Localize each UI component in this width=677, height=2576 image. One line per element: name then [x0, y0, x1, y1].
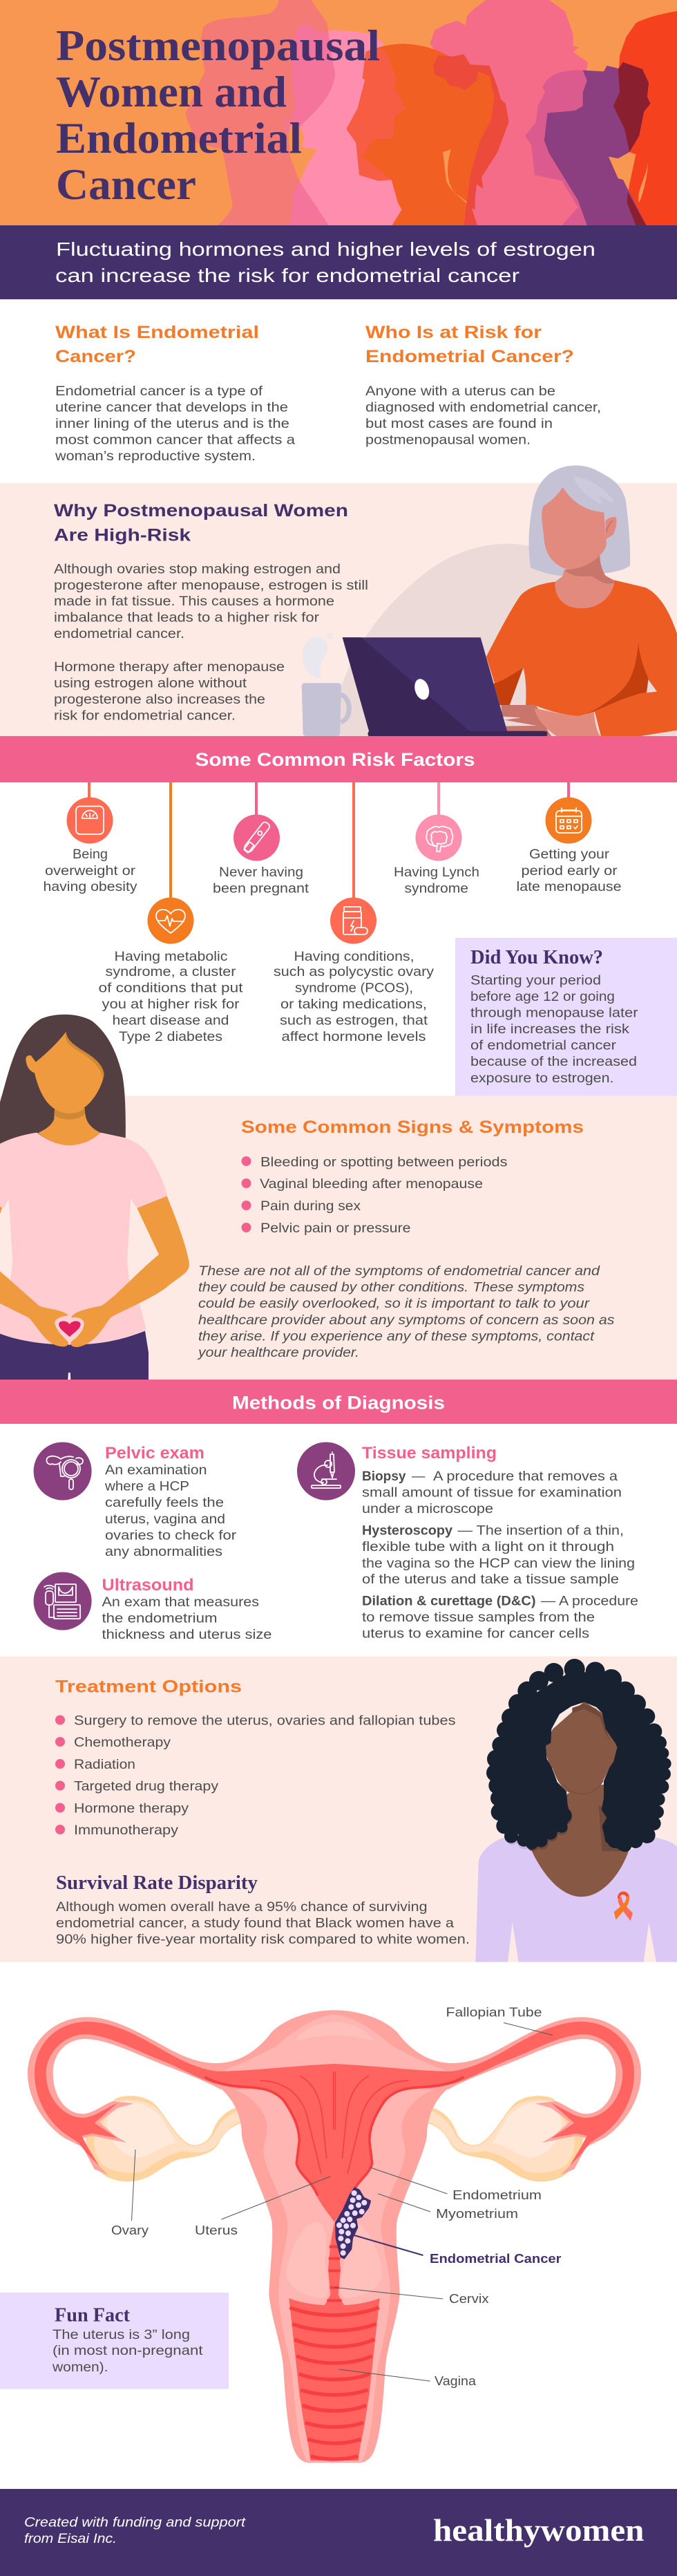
risk factor: overweight: Being — [73, 847, 108, 862]
risk factor: overweight: having obesity — [43, 879, 137, 894]
symptom list: Vaginal bleeding after menopause — [260, 1176, 483, 1192]
band: methods of diagnosis: Methods of Diagnosis — [232, 1392, 445, 1413]
diagnosis: ultrasound: An exam that measures — [102, 1595, 259, 1610]
heading: Are High-Risk — [54, 525, 191, 545]
body text — [54, 561, 368, 723]
text block: who is at risk: Who Is at Risk for — [365, 323, 542, 342]
diagnosis: tissue sampling: — — [412, 1469, 426, 1484]
footer — [0, 2489, 677, 2576]
treatment list: Chemotherapy — [74, 1735, 171, 1750]
risk factor: metabolic syndrome: heart disease and — [112, 1013, 229, 1028]
diagnosis: pelvic exam: Pelvic exam — [105, 1444, 204, 1463]
risk factor: early period or late menopause: late menopause — [517, 879, 622, 894]
risk factor: early period or late menopause — [517, 782, 622, 894]
risk factor: early period or late menopause: period early or — [521, 863, 618, 878]
diagnosis: tissue sampling: Biopsy — [362, 1469, 406, 1484]
text block: what is endometrial cancer: What Is Endometrial — [55, 323, 259, 342]
italic note: could be easily overlooked, so it is important to talk to your — [198, 1296, 591, 1311]
treatment list: Immunotherapy — [74, 1823, 178, 1838]
icon: intestines — [426, 827, 453, 852]
title — [56, 21, 380, 209]
anatomy labels: Vagina — [435, 2374, 477, 2388]
icon: uterus with magnifier — [46, 1456, 83, 1489]
callout: did you know: before age 12 or going — [470, 989, 615, 1004]
risk factor: conditions and medications: or taking medications, — [280, 997, 427, 1012]
body text: risk for endometrial cancer. — [54, 708, 236, 723]
italic note: they could be caused by other conditions. These symptoms — [198, 1280, 584, 1295]
diagnosis: tissue sampling: A procedure that removes a — [433, 1469, 618, 1484]
risk factor: metabolic syndrome: syndrome, a cluster — [105, 964, 236, 979]
header silhouettes of women — [186, 0, 677, 225]
callout: did you know: through menopause later — [470, 1005, 638, 1020]
survival rate disparity: Survival Rate Disparity — [56, 1872, 258, 1894]
icon: scale — [76, 806, 104, 834]
diagnosis: tissue sampling: Dilation & curettage (D&C) — [362, 1594, 536, 1609]
title: Women and — [56, 67, 287, 116]
diagnosis: ultrasound: the endometrium — [102, 1610, 217, 1626]
diagnosis: tissue sampling: under a microscope — [362, 1501, 493, 1516]
treatment list — [55, 1713, 456, 1838]
anatomy labels: Fallopian Tube — [446, 2006, 542, 2020]
risk factor: overweight — [43, 782, 137, 894]
callout: fun fact: (in most non-pregnant — [53, 2343, 203, 2358]
diagnosis: tissue sampling: — The insertion of a thin, — [457, 1523, 624, 1539]
survival rate disparity — [56, 1872, 470, 1947]
panel: treatment options — [0, 1656, 677, 1962]
icon: microscope — [312, 1452, 341, 1488]
anatomy labels: Myometrium — [436, 2207, 518, 2221]
text block: what is endometrial cancer: uterine cancer that develops in the — [55, 399, 288, 415]
callout: did you know: exposure to estrogen. — [470, 1071, 613, 1086]
body text: Hormone therapy after menopause — [54, 659, 285, 675]
icon: heart with pulse — [156, 910, 185, 933]
callout: did you know: because of the increased — [470, 1054, 637, 1069]
risk factor: metabolic syndrome: of conditions that put — [98, 980, 243, 995]
risk factor: conditions and medications — [274, 782, 434, 1044]
body text: endometrial cancer. — [54, 626, 184, 641]
diagnosis: tissue sampling: small amount of tissue for examination — [362, 1485, 622, 1500]
diagnosis: tissue sampling — [297, 1442, 638, 1641]
diagnosis: tissue sampling: the vagina so the HCP can view the lining — [362, 1556, 635, 1571]
risk factor: conditions and medications: syndrome (PCOS), — [295, 980, 413, 995]
diagnosis: pelvic exam: An examination — [105, 1463, 207, 1478]
diagnosis: tissue sampling: Tissue sampling — [362, 1444, 497, 1463]
callout: fun fact: women). — [52, 2360, 108, 2375]
body text: progesterone also increases the — [54, 692, 265, 707]
callout: fun fact: Fun Fact — [55, 2304, 131, 2326]
callout: did you know — [455, 938, 677, 1096]
icon: calendar — [556, 808, 582, 833]
diagnosis: tissue sampling: flexible tube with a light on it through — [362, 1539, 614, 1554]
icon: pregnancy test — [242, 821, 271, 854]
footer: from Eisai Inc. — [24, 2531, 117, 2546]
treatment list: Radiation — [74, 1757, 135, 1772]
treatment list: Targeted drug therapy — [74, 1779, 218, 1794]
callout: fun fact — [0, 2293, 229, 2389]
subtitle band: Fluctuating hormones and higher levels of estrogen — [56, 238, 595, 260]
callout: fun fact: The uterus is 3” long — [53, 2327, 190, 2342]
hair — [486, 1659, 671, 1852]
risk factor: never pregnant — [213, 782, 309, 896]
anatomy labels: Ovary — [111, 2224, 149, 2237]
italic note: healthcare provider about any symptoms of concern as soon as — [198, 1313, 615, 1328]
text block: what is endometrial cancer: woman’s reproductive system. — [55, 449, 256, 464]
diagnosis: pelvic exam: ovaries to check for — [105, 1527, 237, 1543]
anatomy labels — [111, 2006, 561, 2388]
panel: why postmenopausal women are high-risk — [0, 465, 677, 737]
illustration: Black woman with ribbon — [475, 1659, 677, 1962]
panel: signs and symptoms — [0, 1015, 677, 1380]
diagnosis: tissue sampling: — A procedure — [541, 1594, 638, 1609]
anatomy labels: Cervix — [449, 2292, 489, 2306]
risk factor: lynch syndrome — [394, 782, 479, 896]
diagnosis: tissue sampling: Hysteroscopy — [362, 1523, 452, 1539]
body text: imbalance that leads to a higher risk for — [54, 610, 320, 625]
diagnosis: ultrasound — [34, 1572, 271, 1642]
italic note: These are not all of the symptoms of endometrial cancer and — [198, 1263, 600, 1279]
diagnosis: ultrasound: Ultrasound — [102, 1576, 193, 1595]
symptom list — [242, 1154, 508, 1236]
diagnosis: tissue sampling: to remove tissue samples from the — [362, 1610, 595, 1625]
text block: who is at risk: but most cases are found in — [365, 416, 553, 431]
symptom list: Pelvic pain or pressure — [260, 1221, 410, 1236]
text block: who is at risk — [365, 323, 601, 448]
text block: what is endometrial cancer: Cancer? — [55, 347, 136, 366]
heading — [54, 501, 348, 545]
body text: using estrogen alone without — [54, 676, 247, 691]
diagnosis: tissue sampling: uterus to examine for cancer cells — [362, 1626, 589, 1641]
survival rate disparity: 90% higher five-year mortality risk compared to white women. — [56, 1932, 470, 1947]
icon: pill bottle — [343, 907, 368, 934]
risk factor: never pregnant: Never having — [219, 865, 303, 880]
symptom list: Pain during sex — [260, 1198, 361, 1214]
diagnosis: pelvic exam: where a HCP — [104, 1479, 189, 1494]
body text: Although ovaries stop making estrogen and — [54, 561, 341, 576]
anatomy diagram: uterus — [28, 2006, 641, 2463]
anatomy labels: Uterus — [195, 2224, 238, 2237]
diagnosis: pelvic exam: uterus, vagina and — [105, 1512, 225, 1527]
risk factor: lynch syndrome: syndrome — [405, 881, 468, 896]
text block: who is at risk: Endometrial Cancer? — [365, 347, 574, 366]
risk factor: early period or late menopause: Getting your — [529, 847, 610, 862]
uterus right half — [334, 2010, 641, 2463]
uterus left half — [28, 2010, 334, 2463]
text block: what is endometrial cancer: most common cancer that affects a — [55, 433, 295, 448]
text block: what is endometrial cancer — [55, 323, 295, 464]
ribbon — [614, 1892, 633, 1921]
callout: did you know: Did You Know? — [470, 947, 603, 968]
callout: did you know: in life increases the risk — [470, 1022, 629, 1037]
illustration: woman with hands forming heart — [0, 1015, 189, 1380]
text block: who is at risk: postmenopausal women. — [365, 433, 531, 448]
band: some common risk factors: Some Common Risk Factors — [195, 749, 475, 770]
risk factor: overweight: overweight or — [45, 863, 136, 878]
risk factor: metabolic syndrome: Having metabolic — [115, 949, 228, 964]
body text: progesterone after menopause, estrogen is still — [54, 578, 368, 593]
title: Postmenopausal — [56, 21, 380, 70]
title: Endometrial — [56, 113, 302, 162]
cancer cluster — [336, 2188, 370, 2258]
risk factor: metabolic syndrome: you at higher risk for — [102, 997, 240, 1012]
text block: who is at risk: diagnosed with endometrial cancer, — [365, 399, 601, 415]
text block: who is at risk: Anyone with a uterus can be — [365, 384, 555, 399]
illustration: older woman at laptop — [302, 465, 677, 737]
text block: what is endometrial cancer: Endometrial cancer is a type of — [55, 384, 263, 399]
diagnosis: tissue sampling: of the uterus and take a tissue sample — [362, 1572, 619, 1587]
diagnosis: ultrasound: thickness and uterus size — [102, 1627, 272, 1642]
callout: did you know: of endometrial cancer — [470, 1038, 617, 1053]
risk factor: never pregnant: been pregnant — [213, 881, 309, 896]
italic note: your healthcare provider. — [197, 1345, 359, 1360]
title: Cancer — [56, 160, 196, 209]
risk factor: conditions and medications: affect hormone levels — [282, 1029, 426, 1044]
text block: what is endometrial cancer: inner lining of the uterus and is the — [55, 416, 289, 431]
treatment list: Surgery to remove the uterus, ovaries and fallopian tubes — [74, 1713, 456, 1728]
subtitle band: can increase the risk for endometrial cancer — [55, 265, 519, 286]
callout: did you know: Starting your period — [470, 973, 601, 988]
band: methods of diagnosis — [0, 1380, 677, 1424]
risk factor: conditions and medications: Having conditions, — [294, 949, 414, 964]
risk factor: conditions and medications: such as estrogen, that — [280, 1013, 428, 1028]
risk factor: conditions and medications: such as polycystic ovary — [274, 964, 434, 979]
heading: Treatment Options — [55, 1677, 242, 1696]
footer: healthywomen — [433, 2512, 644, 2548]
diagnosis: pelvic exam: carefully feels the — [105, 1495, 224, 1510]
header panel — [0, 0, 677, 225]
diagnosis: pelvic exam: any abnormalities — [105, 1544, 222, 1559]
risk factor: lynch syndrome: Having Lynch — [394, 865, 479, 880]
heading: Why Postmenopausal Women — [54, 501, 348, 520]
survival rate disparity: endometrial cancer, a study found that Black women have a — [56, 1916, 454, 1931]
risk factor: metabolic syndrome — [98, 782, 243, 1044]
footer: Created with funding and support — [24, 2514, 247, 2530]
survival rate disparity: Although women overall have a 95% chance of surviving — [56, 1899, 427, 1915]
icon: ultrasound machine — [44, 1584, 80, 1619]
diagnosis: pelvic exam — [34, 1442, 237, 1559]
italic note — [197, 1263, 615, 1360]
anatomy labels: Endometrial Cancer — [430, 2252, 561, 2266]
risk factor: metabolic syndrome: Type 2 diabetes — [119, 1029, 222, 1044]
band: some common risk factors — [0, 736, 677, 782]
italic note: they arise. If you experience any of these symptoms, contact — [198, 1328, 595, 1344]
anatomy labels: Endometrium — [452, 2188, 542, 2202]
symptom list: Bleeding or spotting between periods — [260, 1154, 508, 1169]
subtitle band — [0, 225, 677, 299]
body text: made in fat tissue. This causes a hormone — [54, 594, 334, 609]
leader lines — [131, 2022, 553, 2381]
treatment list: Hormone therapy — [74, 1801, 189, 1816]
heading: Some Common Signs & Symptoms — [241, 1118, 584, 1137]
